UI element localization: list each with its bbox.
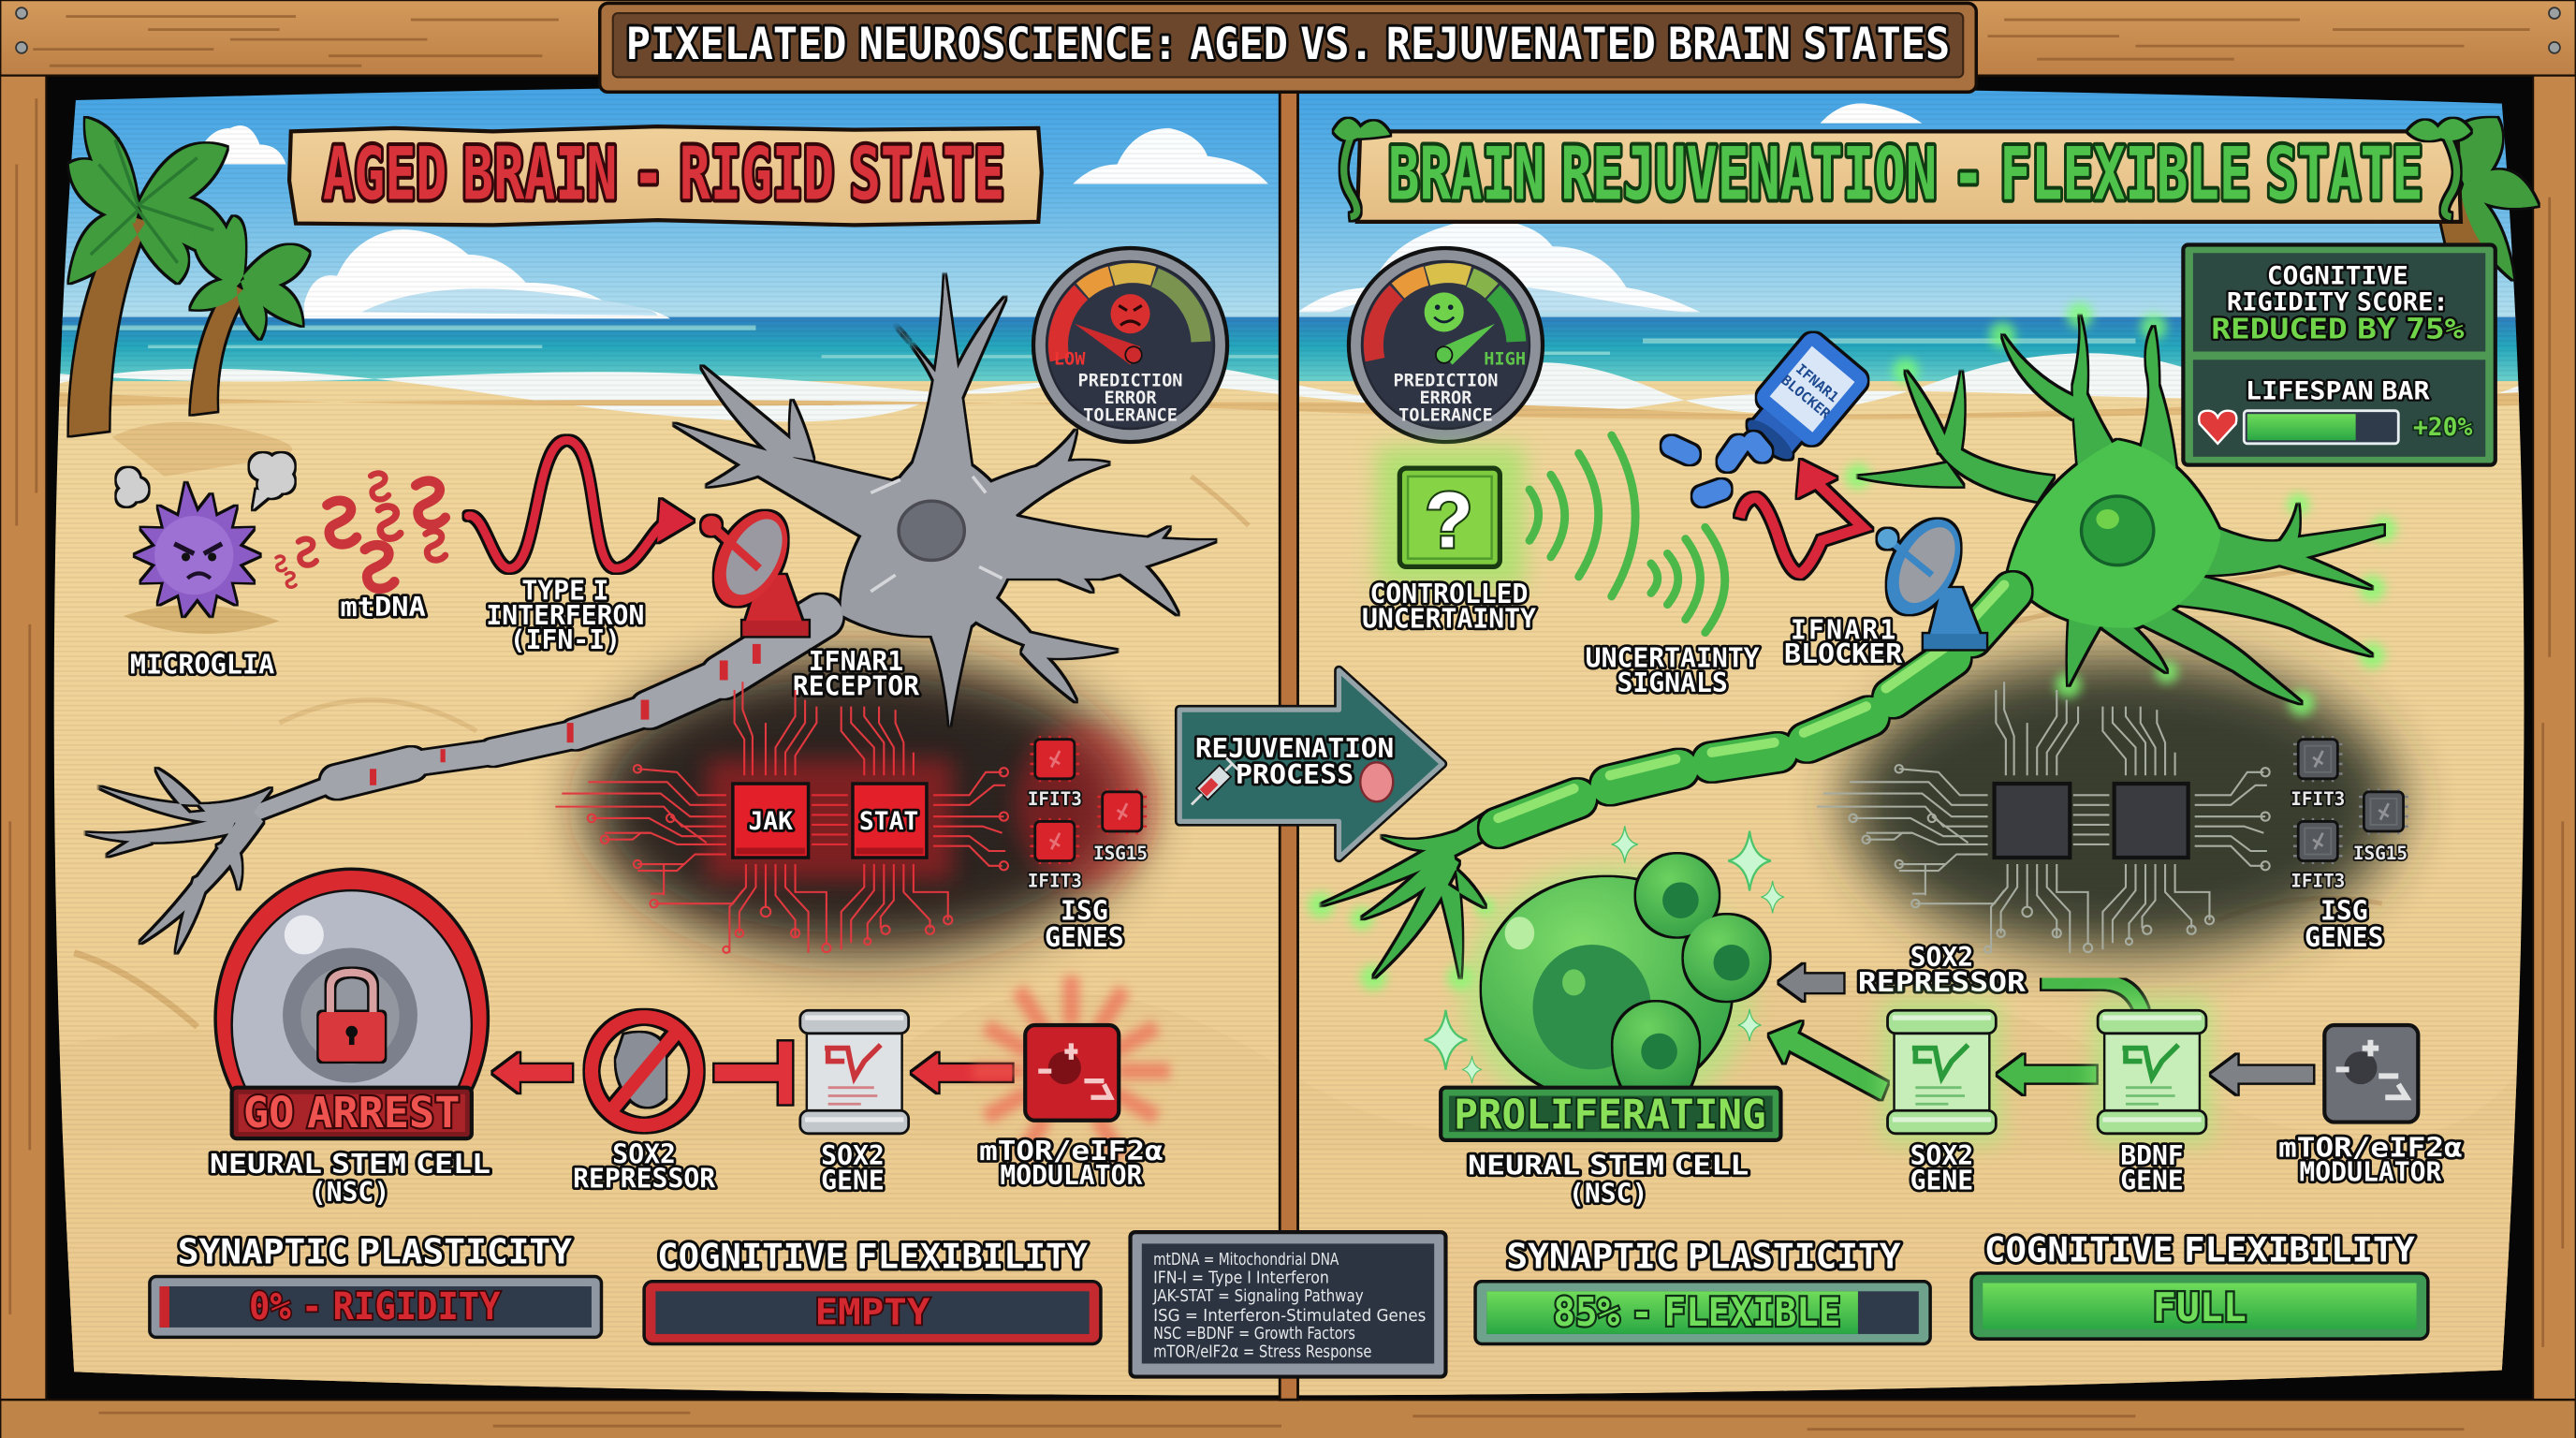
label: neural stem cell left: (NSC) xyxy=(311,1177,389,1208)
label: uncertainty signals: SIGNALS xyxy=(1617,668,1728,698)
label: controlled uncertainty: CONTROLLED xyxy=(1369,579,1528,609)
legend xyxy=(1131,1232,1445,1377)
label: neural stem cell right: NEURAL STEM CELL xyxy=(1468,1151,1749,1181)
axon damage marks xyxy=(370,644,761,785)
rejuvenation process arrow: PROCESS xyxy=(1236,759,1354,790)
icon: heart xyxy=(2199,411,2236,444)
icon: red modulator xyxy=(973,976,1170,1158)
ISG gene chips right: ISG15 xyxy=(2353,843,2408,864)
label: modulator right: mTOR/eIF2α xyxy=(2278,1132,2463,1163)
arrow: BDNF to SOX2 xyxy=(1998,1055,2096,1094)
aged heading: AGED BRAIN - RIGID STATE xyxy=(323,132,1004,216)
label: BDNF gene: BDNF xyxy=(2120,1140,2184,1171)
icon: padlock xyxy=(319,973,385,1062)
arrow: repressor to NSC xyxy=(493,1053,572,1093)
legend: NSC =BDNF = Growth Factors xyxy=(1153,1325,1355,1343)
dark circuit shadow right xyxy=(1847,657,2398,953)
gauge left: LOW xyxy=(1054,350,1086,370)
label: ISG genes right: GENES xyxy=(2305,922,2384,953)
inhibition bar xyxy=(715,1042,792,1104)
arrow: gray to NSC xyxy=(1779,964,1843,1001)
neural stem cell right xyxy=(1425,826,1784,1140)
aged banner xyxy=(289,126,1042,225)
smoke puffs xyxy=(117,453,294,509)
ISG gene chips right xyxy=(2291,736,2408,892)
label: SOX2 repressor right: REPRESSOR xyxy=(1858,967,2026,998)
label: modulator left: MODULATOR xyxy=(1000,1160,1142,1191)
label: IFNAR1 blocker: BLOCKER xyxy=(1784,638,1902,669)
legend: IFN-I = Type I Interferon xyxy=(1153,1269,1329,1288)
axon xyxy=(246,616,822,816)
legend: mtDNA = Mitochondrial DNA xyxy=(1153,1251,1339,1269)
myelin sheath xyxy=(1499,592,2012,828)
gauge right: PREDICTION xyxy=(1393,371,1498,390)
synaptic plasticity left xyxy=(150,1231,601,1337)
synaptic plasticity right: SYNAPTIC PLASTICITY xyxy=(1506,1237,1901,1277)
synaptic plasticity left: SYNAPTIC PLASTICITY xyxy=(178,1231,573,1271)
chip: STAT xyxy=(853,784,927,858)
ISG gene chips left: IFIT3 xyxy=(1028,871,1082,892)
cognitive flexibility left: COGNITIVE FLEXIBILITY xyxy=(657,1237,1089,1277)
label: type I interferon: (IFN-I) xyxy=(510,624,621,655)
blocker bottle xyxy=(1734,329,1872,473)
cognitive rigidity and lifespan panel: COGNITIVE xyxy=(2267,263,2408,291)
dormant chip left xyxy=(1995,784,2070,858)
center wood divider xyxy=(1280,92,1298,1400)
scroll: BDNF gene xyxy=(2093,999,2211,1143)
ISG gene chips left xyxy=(1016,723,1153,892)
label: mtDNA: mtDNA xyxy=(340,592,426,623)
gauge right: ERROR xyxy=(1419,389,1472,408)
label: controlled uncertainty: UNCERTAINTY xyxy=(1362,603,1536,634)
rejuvenation process arrow: REJUVENATION xyxy=(1195,733,1394,764)
legend: mTOR/eIF2α = Stress Response xyxy=(1153,1343,1371,1361)
chip: JAK: JAK xyxy=(748,808,793,836)
ISG gene chips left: IFIT3 xyxy=(1028,788,1082,810)
label: SOX2 gene right: GENE xyxy=(1910,1165,1973,1196)
green pipe xyxy=(2042,982,2143,1012)
title plaque xyxy=(600,4,1976,92)
mtDNA fragments xyxy=(276,473,446,589)
synaptic plasticity left: 0% - RIGIDITY xyxy=(249,1284,501,1328)
gauge left: ERROR xyxy=(1105,389,1157,408)
label: BDNF gene: GENE xyxy=(2120,1165,2184,1196)
blocker bottle: IFNAR1 xyxy=(1793,360,1842,405)
dendrite glow xyxy=(1308,302,2397,990)
icon: brain xyxy=(1360,762,1393,801)
gauge right xyxy=(1349,248,1543,442)
label: microglia: MICROGLIA xyxy=(130,649,274,680)
cognitive flexibility right: COGNITIVE FLEXIBILITY xyxy=(1984,1230,2416,1270)
ISG gene chips left: ISG15 xyxy=(1093,843,1148,864)
neural stem cell left xyxy=(215,869,488,1168)
dendrites xyxy=(85,274,1216,953)
chip: JAK xyxy=(733,784,809,858)
dormant chip right xyxy=(2115,784,2188,858)
rejuvenation process arrow xyxy=(1179,670,1442,858)
proliferating badge: PROLIFERATING xyxy=(1454,1092,1766,1139)
cognitive flexibility right xyxy=(1971,1230,2428,1339)
label: ISG genes right: ISG xyxy=(2320,896,2368,927)
legend: JAK-STAT = Signaling Pathway xyxy=(1152,1287,1364,1306)
red blocked signal arrow xyxy=(1740,460,1863,573)
label: SOX2 gene right: SOX2 xyxy=(1910,1140,1973,1171)
clouds xyxy=(194,103,1922,318)
vines xyxy=(1334,119,2470,217)
pills xyxy=(1659,428,1776,509)
gauge left: TOLERANCE xyxy=(1083,406,1178,426)
label: uncertainty signals: UNCERTAINTY xyxy=(1586,642,1760,673)
synaptic plasticity right: 85% - FLEXIBLE xyxy=(1553,1289,1840,1335)
controlled uncertainty block: ? xyxy=(1425,476,1473,564)
label: SOX2 gene left: SOX2 xyxy=(821,1140,885,1171)
arrow: modulator to gene xyxy=(912,1053,1012,1093)
dark circuit shadow left xyxy=(587,657,1138,953)
daughter cells xyxy=(1613,855,1769,1088)
label: modulator right: MODULATOR xyxy=(2299,1157,2442,1188)
lifespan bar xyxy=(2244,411,2398,444)
controlled uncertainty block xyxy=(1377,447,1525,588)
label: SOX2 repressor left: SOX2 xyxy=(612,1138,676,1169)
arrow: modulator to BDNF gray xyxy=(2211,1055,2313,1094)
go arrest badge: GO ARREST xyxy=(243,1088,461,1137)
cognitive flexibility left xyxy=(644,1237,1101,1343)
palm trees left xyxy=(69,118,309,435)
chip: STAT: STAT xyxy=(859,808,918,836)
cognitive flexibility right: FULL xyxy=(2153,1284,2247,1330)
cognitive rigidity and lifespan panel: REDUCED BY 75% xyxy=(2211,313,2465,345)
gauge right: TOLERANCE xyxy=(1398,406,1493,426)
icon: gray modulator xyxy=(2324,1025,2418,1123)
legend: ISG = Interferon-Stimulated Genes xyxy=(1153,1307,1426,1326)
JAK-STAT circuit left xyxy=(555,682,1008,953)
label: ISG genes left: ISG xyxy=(1061,896,1108,927)
cognitive flexibility left: EMPTY xyxy=(815,1291,930,1333)
chip glow xyxy=(707,759,953,881)
blocker dish xyxy=(1872,507,1986,649)
icon: prohibited repressor xyxy=(592,1017,696,1125)
scroll: SOX2 gene right xyxy=(1882,999,2001,1143)
label: IFNAR1 receptor: RECEPTOR xyxy=(793,670,919,701)
microglia xyxy=(117,453,294,616)
label: type I interferon: INTERFERON xyxy=(486,600,644,631)
synaptic plasticity right xyxy=(1475,1237,1930,1343)
cognitive rigidity and lifespan panel: +20% xyxy=(2413,414,2472,442)
label: IFNAR1 blocker: IFNAR1 xyxy=(1791,615,1895,646)
scroll: SOX2 gene left xyxy=(800,1010,909,1134)
type I interferon wave xyxy=(468,440,694,568)
cognitive rigidity and lifespan panel: RIGIDITY SCORE: xyxy=(2227,289,2449,317)
ISG gene chips right: IFIT3 xyxy=(2291,788,2345,810)
gauge left xyxy=(1033,248,1227,442)
title text: PIXELATED NEUROSCIENCE: AGED VS. REJUVENATED BRAIN STATES xyxy=(626,19,1950,70)
cognitive rigidity and lifespan panel: LIFESPAN BAR xyxy=(2246,377,2430,405)
rejuvenation banner xyxy=(1334,119,2470,222)
label: IFNAR1 receptor: IFNAR1 xyxy=(809,646,903,677)
label: SOX2 gene left: GENE xyxy=(821,1165,885,1196)
aged neuron xyxy=(85,274,1216,953)
gauge left: PREDICTION xyxy=(1078,371,1183,390)
label: type I interferon: TYPE I xyxy=(521,576,608,607)
cognitive rigidity and lifespan panel xyxy=(2183,244,2496,465)
label: neural stem cell right: (NSC) xyxy=(1569,1179,1647,1210)
palm tree right xyxy=(2437,118,2538,279)
circuit right xyxy=(1817,682,2270,953)
label: neural stem cell left: NEURAL STEM CELL xyxy=(210,1149,490,1180)
label: modulator left: mTOR/eIF2α xyxy=(979,1136,1164,1167)
label: SOX2 repressor right: SOX2 xyxy=(1910,942,1973,973)
label: SOX2 repressor left: REPRESSOR xyxy=(573,1164,715,1195)
arrow: sox2 to NSC xyxy=(1769,1022,1888,1099)
blocker bottle: BLOCKER xyxy=(1778,372,1834,422)
rejuvenated neuron xyxy=(1308,302,2397,990)
IFNAR1 receptor dish xyxy=(699,499,809,636)
label: ISG genes left: GENES xyxy=(1045,922,1124,953)
ISG gene chips right: IFIT3 xyxy=(2291,871,2345,892)
uncertainty signal waves xyxy=(1530,435,1725,633)
sparkles xyxy=(1425,826,1784,1083)
gauge right: HIGH xyxy=(1484,350,1526,370)
icon: syringe xyxy=(1186,758,1238,811)
